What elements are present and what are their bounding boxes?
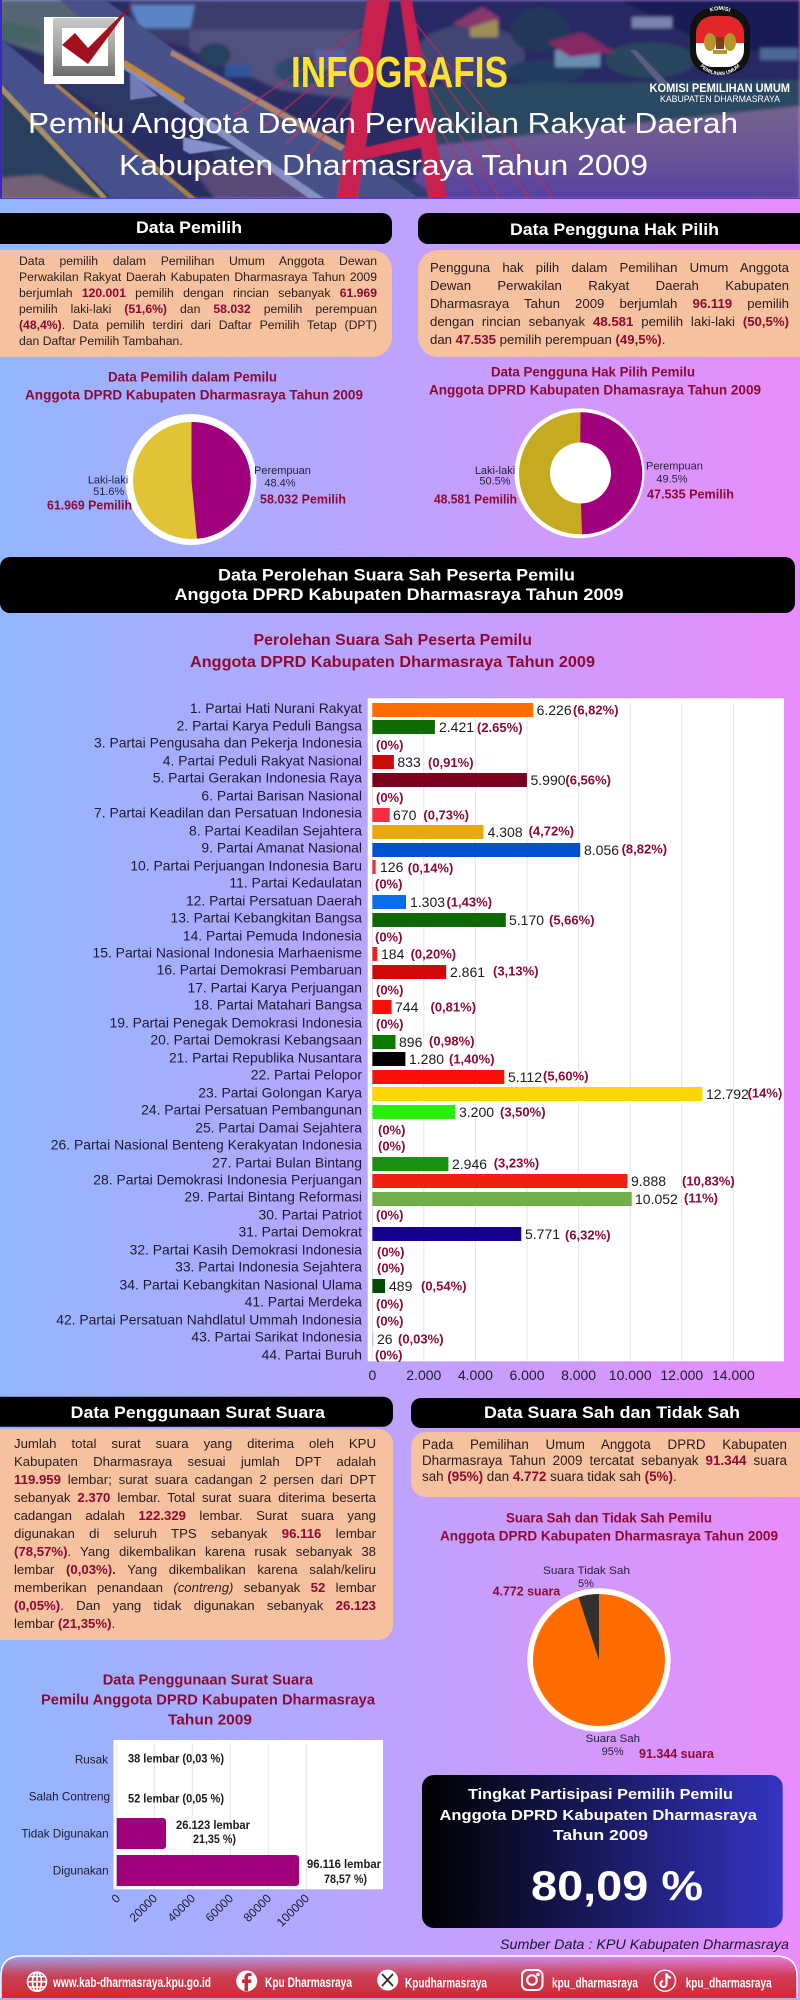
x axis: [369, 1367, 755, 1383]
chart title: Data Pemilih: [25, 370, 363, 403]
icon: globe: [28, 1972, 46, 1991]
row 17: 17. Partai Karya Perjuangan: [187, 980, 362, 996]
row 21: 1.280: [409, 1051, 444, 1067]
section bar: Data Perolehan Suara Sah: Data Perolehan Suara Sah Peserta Pemilu: [218, 565, 575, 584]
bar: Tidak Digunakan: 21,35 %): [193, 1834, 236, 1846]
chart title: Data Pemilih: Data Pemilih dalam Pemilu: [108, 370, 277, 385]
text panel: Data Pengguna Hak Pilih: Dewan Perwakilan Rakyat Daerah Kabupaten: [430, 278, 789, 292]
icon: facebook: [236, 1970, 257, 1992]
row 28: (10,83%): [682, 1174, 735, 1188]
facebook name: Kpu Dharmasraya: [265, 1975, 352, 1990]
chart title: Perolehan Suara Sah: Perolehan Suara Sah Peserta Pemilu: [254, 632, 532, 649]
section bar: Data Pengguna Hak Pilih: [418, 213, 800, 244]
row 5: (6,56%): [565, 772, 611, 788]
row 31: [238, 1224, 611, 1242]
text panel: Data Penggunaan Surat Suara: lembar (21,35%).: [14, 1616, 115, 1630]
row 34: (0,54%): [421, 1278, 467, 1294]
row 23: [198, 1085, 782, 1102]
x axis: 14.000: [712, 1367, 755, 1383]
website: www.kab-dharmasraya.kpu.go.id: [52, 1975, 211, 1990]
row 41: (0%): [376, 1296, 403, 1312]
row 41: 41. Partai Merdeka: [245, 1294, 362, 1310]
row 1: (6,82%): [573, 702, 619, 718]
pie chart: Suara Sah dan Tidak Sah: 91.344 suara: [639, 1746, 715, 1761]
x axis: 0: [108, 1891, 123, 1906]
row 29: 29. Partai Bintang Reformasi: [184, 1189, 362, 1205]
row 30: (0%): [376, 1208, 403, 1222]
row 34: 489: [389, 1278, 413, 1294]
text panel: Data Penggunaan Surat Suara: (0,05%). Dan yang tidak digunakan sebanyak 26.123: [14, 1598, 376, 1612]
section bar: Data Pengguna Hak Pilih: Data Pengguna Hak Pilih: [510, 221, 719, 239]
row 24: 24. Partai Persatuan Pembangunan: [141, 1102, 362, 1118]
x axis: [108, 1891, 312, 1929]
row 16: (3,13%): [493, 964, 539, 978]
logo: KPU emblem and name: [650, 6, 790, 105]
row 14: (0%): [375, 930, 402, 944]
row 29: [184, 1189, 718, 1207]
pie chart: Suara Sah dan Tidak Sah: Suara Tidak Sah: [543, 1565, 630, 1577]
text panel: Data Pengguna Hak Pilih: [418, 250, 800, 357]
row 42: (0%): [376, 1314, 403, 1328]
row 23: 23. Partai Golongan Karya: [198, 1085, 362, 1101]
row 2: 2. Partai Karya Peduli Bangsa: [177, 718, 362, 734]
bar: Rusak: 38 lembar (0,03 %): [128, 1754, 224, 1766]
panel: tingkat partisipasi: 80,09 %: [531, 1862, 703, 1909]
x axis: 6.000: [509, 1367, 545, 1383]
row 10: [130, 858, 453, 876]
bar: Digunakan: Digunakan: [53, 1864, 109, 1878]
row 31: 5.771: [525, 1226, 560, 1242]
x axis: 40000: [165, 1891, 198, 1925]
x axis: 80000: [241, 1891, 274, 1925]
bar: Tidak Digunakan: [21, 1818, 250, 1849]
pie chart: Suara Sah dan Tidak Sah: 95%: [602, 1746, 624, 1758]
x axis: 2.000: [406, 1367, 442, 1383]
row 15: 15. Partai Nasional Indonesia Marhaenisme: [93, 945, 362, 961]
row 17: (0%): [376, 982, 403, 998]
chart title: Perolehan Suara Sah: [190, 632, 595, 671]
bar: Tidak Digunakan: Tidak Digunakan: [21, 1828, 109, 1840]
chart title: Data Penggunaan Surat Suara: Data Penggunaan Surat Suara: [103, 1671, 314, 1688]
icon: X: [377, 1970, 398, 1990]
chart title: Data Pengguna Hak Pilih: Anggota DPRD Kabupaten Dhamasraya Tahun 2009: [429, 383, 761, 398]
row 15: 184: [381, 946, 405, 962]
row 31: (6,32%): [565, 1228, 611, 1242]
footer bar: [0, 1956, 800, 2000]
row 15: [93, 945, 456, 962]
panel: tingkat partisipasi: [422, 1775, 783, 1928]
x axis: 60000: [203, 1891, 236, 1925]
row 16: 16. Partai Demokrasi Pembaruan: [157, 962, 362, 978]
row 11: 11. Partai Kedaulatan: [229, 875, 362, 891]
row 8: [189, 823, 574, 840]
bar: Digunakan: [53, 1855, 382, 1886]
row 25: 25. Partai Damai Sejahtera: [195, 1120, 362, 1136]
row 31: 31. Partai Demokrat: [238, 1224, 362, 1240]
text panel: Data Penggunaan Surat Suara: 119.959 lembar; surat suara cadangan 2 persen dari DPT: [14, 1472, 376, 1486]
donut chart: Data Pengguna Hak Pilih: Perempuan: [646, 461, 703, 473]
row 44: (0%): [375, 1348, 402, 1362]
pie chart: Data Pemilih: 61.969 Pemilih: [47, 497, 132, 512]
row 29: (11%): [684, 1190, 718, 1206]
logo: KPU emblem and name: KABUPATEN DHARMASRAYA: [660, 94, 781, 105]
title: Pemilu Anggota Dewan Perwakilan Rakyat Daerah: [28, 108, 738, 140]
row 24: [141, 1102, 546, 1120]
bar: Salah Contreng: Salah Contreng: [29, 1790, 110, 1804]
pie chart: Data Pemilih: Perempuan: [254, 465, 311, 477]
bar: Salah Contreng: 52 lembar (0,05 %): [128, 1794, 224, 1806]
logo: KPU emblem and name: KOMISI PEMILIHAN UMUM: [650, 83, 790, 95]
panel: tingkat partisipasi: Anggota DPRD Kabupaten Dharmasraya: [440, 1807, 758, 1824]
text panel: Data Penggunaan Surat Suara: digunakan di seluruh TPS sebanyak 96.116 lembar: [14, 1526, 376, 1540]
donut chart: Data Pengguna Hak Pilih: 50.5%: [479, 476, 511, 488]
text panel: Data Penggunaan Surat Suara: (78,57%). Yang dikembalikan karena rusak sebanyak 38: [14, 1544, 376, 1558]
row 18: [194, 997, 476, 1015]
row 2: [177, 718, 523, 735]
text panel: Data Pemilih: Data pemilih dalam Pemilihan Umum Anggota Dewan: [19, 254, 377, 268]
row 8: (4,72%): [529, 824, 574, 838]
row 20: (0,98%): [429, 1034, 475, 1048]
chart title: Suara Sah dan Tidak Sah: [440, 1511, 778, 1544]
row 13: [170, 910, 595, 928]
row 5: 5. Partai Gerakan Indonesia Raya: [153, 770, 362, 786]
row 34: [120, 1277, 467, 1294]
row 14: 14. Partai Pemuda Indonesia: [183, 928, 362, 944]
row 43: 26: [377, 1331, 393, 1347]
left road: [0, 38, 195, 199]
header banner: bridge photo: [0, 0, 800, 199]
text panel: Data Penggunaan Surat Suara: sebanyak 2.370 lembar. Total surat suara diterima beserta: [14, 1490, 376, 1504]
pie chart: Suara Sah dan Tidak Sah: 4.772 suara: [493, 1584, 561, 1598]
row 24: 3.200: [459, 1104, 494, 1120]
row 32: (0%): [377, 1244, 404, 1260]
row 22: [251, 1067, 589, 1085]
text panel: Data Pengguna Hak Pilih: dengan rincian sebanyak 48.581 pemilih laki-laki (50,5%): [430, 314, 789, 328]
row 20: 896: [399, 1034, 423, 1050]
chart title: Perolehan Suara Sah: Anggota DPRD Kabupaten Dharmasraya Tahun 2009: [190, 654, 595, 671]
x axis: 0: [369, 1367, 377, 1383]
row 33: 33. Partai Indonesia Sejahtera: [175, 1259, 362, 1275]
row 28: [93, 1172, 735, 1189]
row 5: 5.990: [530, 772, 566, 788]
pie chart: Data Pemilih: [47, 414, 346, 545]
row 41: [245, 1294, 403, 1312]
row 3: 3. Partai Pengusaha dan Pekerja Indonesia: [94, 735, 362, 751]
row 6: (0%): [376, 790, 403, 805]
row 7: 7. Partai Keadilan dan Persatuan Indonesia: [94, 805, 362, 821]
row 21: (1,40%): [449, 1052, 495, 1066]
row 5: [153, 770, 611, 788]
x axis: 12.000: [660, 1367, 703, 1383]
red suspension pylon: [235, 10, 555, 199]
instagram handle: kpu_dharmasraya: [552, 1976, 638, 1990]
text panel: Data Pengguna Hak Pilih: dan 47.535 pemilih perempuan (49,5%).: [430, 332, 665, 346]
bar: Digunakan: 96.116 lembar: [307, 1859, 382, 1871]
row 28: 9.888: [631, 1173, 666, 1189]
text panel: Data Suara Sah dan Tidak Sah: sah (95%) dan 4.772 suara tidak sah (5%).: [422, 1469, 677, 1484]
row 2: (2.65%): [477, 720, 523, 735]
row 18: (0,81%): [430, 1000, 476, 1014]
text panel: Data Penggunaan Surat Suara: cadangan adalah 122.329 lembar. Surat suara yang: [14, 1508, 376, 1522]
row 42: 42. Partai Persatuan Nahdlatul Ummah Indonesia: [56, 1312, 362, 1328]
row 1: 6.226: [537, 702, 572, 718]
x axis: 10.000: [609, 1367, 652, 1383]
pie chart: Data Pemilih: 48.4%: [264, 478, 296, 490]
logo: ballot checkmark: [44, 3, 133, 84]
section bar: Data Penggunaan Surat Suara: [0, 1397, 393, 1427]
row 26: 26. Partai Nasional Benteng Kerakyatan Indonesia: [51, 1137, 362, 1153]
row 8: 8. Partai Keadilan Sejahtera: [189, 823, 362, 839]
row 43: (0,03%): [398, 1332, 444, 1346]
row 33: (0%): [377, 1260, 404, 1276]
section bar: Data Pemilih: [0, 213, 392, 244]
row 13: 13. Partai Kebangkitan Bangsa: [170, 910, 362, 926]
row 12: 12. Partai Persatuan Daerah: [186, 893, 362, 909]
pie chart: Data Pemilih: 51.6%: [93, 486, 125, 498]
row 15: (0,20%): [411, 946, 456, 962]
section bar: Data Perolehan Suara Sah: [0, 557, 795, 613]
row 12: (1,43%): [446, 894, 492, 910]
X handle: Kpudharmasraya: [405, 1976, 487, 1990]
row 6: 6. Partai Barisan Nasional: [201, 788, 362, 804]
chart title: Data Pengguna Hak Pilih: Data Pengguna Hak Pilih Pemilu: [491, 365, 695, 380]
text panel: Data Pemilih: [0, 250, 392, 357]
text panel: Data Pemilih: pemilih laki-laki (51,6%) dan 58.032 pemilih perempuan: [19, 302, 377, 316]
row 9: [201, 840, 667, 858]
bar chart: penggunaan surat suara: [21, 1740, 383, 1929]
section bar: Data Pemilih: Data Pemilih: [136, 219, 242, 237]
text panel: Data Suara Sah dan Tidak Sah: [411, 1432, 800, 1497]
row 44: 44. Partai Buruh: [262, 1347, 362, 1363]
row 20: 20. Partai Demokrasi Kebangsaan: [150, 1032, 362, 1048]
chart title: Data Pengguna Hak Pilih: [429, 365, 761, 398]
row 29: 10.052: [635, 1191, 678, 1207]
text panel: Data Pemilih: dan Daftar Pemilih Tambahan.: [19, 334, 183, 348]
x axis: 8.000: [561, 1367, 596, 1383]
chart title: Data Penggunaan Surat Suara: [41, 1671, 376, 1728]
text panel: Data Penggunaan Surat Suara: memberikan penandaan (contreng) sebanyak 52 lembar: [14, 1580, 376, 1594]
row 26: (0%): [378, 1138, 405, 1154]
bridge deck: [60, 0, 420, 199]
logo: KPU emblem and name: KOMISI: [710, 6, 731, 12]
row 12: [186, 893, 492, 910]
row 34: 34. Partai Kebangkitan Nasional Ulama: [120, 1277, 362, 1293]
pie chart: Data Pemilih: 58.032 Pemilih: [260, 492, 346, 507]
row 4: (0,91%): [428, 755, 474, 770]
text panel: Data Penggunaan Surat Suara: [0, 1429, 393, 1640]
row 4: [163, 753, 474, 770]
row 12: 1.303: [410, 894, 445, 910]
section bar: Data Perolehan Suara Sah: Anggota DPRD Kabupaten Dharmasraya Tahun 2009: [174, 585, 624, 604]
panel: tingkat partisipasi: Tingkat Partisipasi Pemilih Pemilu: [468, 1786, 733, 1803]
text panel: Data Penggunaan Surat Suara: lembar (0,03%). Yang dikembalikan karena salah/keliru: [14, 1562, 376, 1576]
row 30: 30. Partai Patriot: [259, 1207, 362, 1223]
row 22: 22. Partai Pelopor: [251, 1067, 362, 1083]
x axis: 20000: [127, 1891, 160, 1925]
icon: instagram: [522, 1970, 542, 1990]
text panel: Data Pemilih: Perwakilan Rakyat Daerah Kabupaten Dharmasraya Tahun 2009: [19, 270, 377, 284]
chart title: Data Pemilih: Anggota DPRD Kabupaten Dharmasraya Tahun 2009: [25, 388, 363, 403]
row 10: (0,14%): [408, 860, 453, 876]
pie chart: Suara Sah dan Tidak Sah: Suara Sah: [586, 1733, 640, 1745]
row 2: 2.421: [439, 719, 474, 735]
donut chart: Data Pengguna Hak Pilih: 48.581 Pemilih: [434, 491, 517, 506]
row 9: 8.056: [584, 842, 619, 858]
row 19: 19. Partai Penegak Demokrasi Indonesia: [110, 1015, 362, 1031]
bar: Rusak: Rusak: [75, 1754, 108, 1766]
row 24: (3,50%): [500, 1104, 546, 1120]
chart title: Data Penggunaan Surat Suara: Tahun 2009: [168, 1711, 252, 1728]
row 10: 10. Partai Perjuangan Indonesia Baru: [130, 858, 362, 874]
row 28: 28. Partai Demokrasi Indonesia Perjuangan: [93, 1172, 362, 1188]
row 9: (8,82%): [622, 842, 667, 856]
text panel: Data Penggunaan Surat Suara: Kabupaten Dharmasraya sesuai jumlah DPT adalah: [14, 1454, 376, 1468]
text panel: Data Pengguna Hak Pilih: Pengguna hak pilih dalam Pemilihan Umum Anggota: [430, 260, 789, 274]
row 27: (3,23%): [494, 1156, 539, 1170]
bar chart: perolehan suara per partai: [51, 698, 784, 1383]
row 16: 2.861: [450, 964, 485, 980]
bar: Salah Contreng: [29, 1790, 224, 1806]
heading: INFOGRAFIS: INFOGRAFIS: [291, 48, 508, 97]
title: [28, 108, 738, 182]
logo: KPU emblem and name: PEMILIHAN UMUM: [700, 64, 740, 75]
row 1: 1. Partai Hati Nurani Rakyat: [190, 700, 362, 716]
pie chart: Data Pemilih: Laki-laki: [88, 474, 128, 486]
bar: Rusak: [75, 1754, 224, 1766]
text panel: Data Suara Sah dan Tidak Sah: Pada Pemilihan Umum Anggota DPRD Kabupaten: [422, 1437, 787, 1452]
text panel: Data Suara Sah dan Tidak Sah: Dharmasraya Tahun 2009 tercatat sebanyak 91.344 suara: [422, 1453, 787, 1468]
row 16: [157, 962, 539, 980]
section bar: Data Suara Sah dan Tidak Sah: Data Suara Sah dan Tidak Sah: [484, 1404, 740, 1422]
donut chart: Data Pengguna Hak Pilih: 47.535 Pemilih: [647, 487, 734, 502]
row 7: (0,73%): [423, 808, 469, 822]
row 1: [190, 700, 619, 718]
section bar: Data Penggunaan Surat Suara: Data Penggunaan Surat Suara: [71, 1404, 326, 1422]
row 9: 9. Partai Amanat Nasional: [201, 840, 362, 856]
row 27: 27. Partai Bulan Bintang: [212, 1155, 362, 1171]
source note: Sumber Data : KPU Kabupaten Dharmasraya: [500, 1936, 789, 1952]
row 21: [169, 1050, 495, 1067]
row 22: 5.112: [508, 1069, 542, 1085]
title: Kabupaten Dharmasraya Tahun 2009: [119, 150, 648, 182]
tiktok handle: kpu_dharmasraya: [686, 1976, 772, 1990]
row 18: 744: [395, 999, 419, 1015]
row 7: [94, 805, 469, 823]
row 43: [191, 1329, 444, 1347]
row 27: 2.946: [452, 1156, 487, 1172]
row 13: 5.170: [509, 912, 544, 928]
text panel: Data Penggunaan Surat Suara: Jumlah total surat suara yang diterima oleh KPU: [14, 1436, 376, 1450]
chart title: Data Penggunaan Surat Suara: Pemilu Anggota DPRD Kabupaten Dharmasraya: [41, 1691, 376, 1708]
icon: tiktok: [654, 1970, 676, 1991]
text panel: Data Pemilih: (48,4%). Data pemilih terdiri dari Daftar Pemilih Tetap (DPT): [19, 318, 377, 332]
pie chart: Suara Sah dan Tidak Sah: 5%: [578, 1578, 594, 1590]
row 4: 4. Partai Peduli Rakyat Nasional: [163, 753, 362, 769]
row 23: 12.792: [706, 1086, 749, 1102]
row 20: [150, 1032, 475, 1050]
donut chart: Data Pengguna Hak Pilih: [434, 408, 734, 538]
bar: Tidak Digunakan: 26.123 lembar: [176, 1820, 250, 1832]
row 27: [212, 1155, 539, 1172]
pie chart: Suara Sah dan Tidak Sah: [493, 1565, 715, 1761]
row 7: 670: [393, 807, 417, 823]
chart title: Suara Sah dan Tidak Sah: Anggota DPRD Kabupaten Dharmasraya Tahun 2009: [440, 1529, 778, 1544]
row 19: (0%): [376, 1016, 403, 1032]
x axis: 4.000: [458, 1367, 493, 1383]
donut chart: Data Pengguna Hak Pilih: Laki-laki: [475, 465, 515, 477]
text panel: Data Pemilih: berjumlah 120.001 pemilih dengan rincian sebanyak 61.969: [19, 286, 377, 300]
row 23: (14%): [748, 1086, 782, 1100]
section bar: Data Suara Sah dan Tidak Sah: [411, 1398, 800, 1428]
row 43: 43. Partai Sarikat Indonesia: [191, 1329, 362, 1345]
row 18: 18. Partai Matahari Bangsa: [194, 997, 362, 1013]
row 13: (5,66%): [549, 912, 595, 928]
row 22: (5,60%): [543, 1068, 589, 1084]
panel: tingkat partisipasi: Tahun 2009: [553, 1827, 648, 1844]
chart title: Suara Sah dan Tidak Sah: Suara Sah dan Tidak Sah Pemilu: [506, 1511, 712, 1526]
houses, blurred: [130, 5, 195, 28]
bar: Digunakan: 78,57 %): [324, 1874, 367, 1886]
row 8: 4.308: [488, 824, 523, 840]
donut chart: Data Pengguna Hak Pilih: 49.5%: [656, 474, 688, 486]
row 10: 126: [380, 859, 404, 875]
text panel: Data Pengguna Hak Pilih: Dharmasraya Tahun 2009 berjumlah 96.119 pemilih: [430, 296, 789, 310]
x axis: 100000: [274, 1891, 312, 1929]
row 3: (0%): [376, 738, 403, 752]
row 11: (0%): [375, 876, 402, 892]
row 21: 21. Partai Republika Nusantara: [169, 1050, 362, 1066]
row 32: 32. Partai Kasih Demokrasi Indonesia: [130, 1242, 362, 1258]
row 4: 833: [397, 754, 421, 770]
row 25: (0%): [378, 1122, 405, 1138]
